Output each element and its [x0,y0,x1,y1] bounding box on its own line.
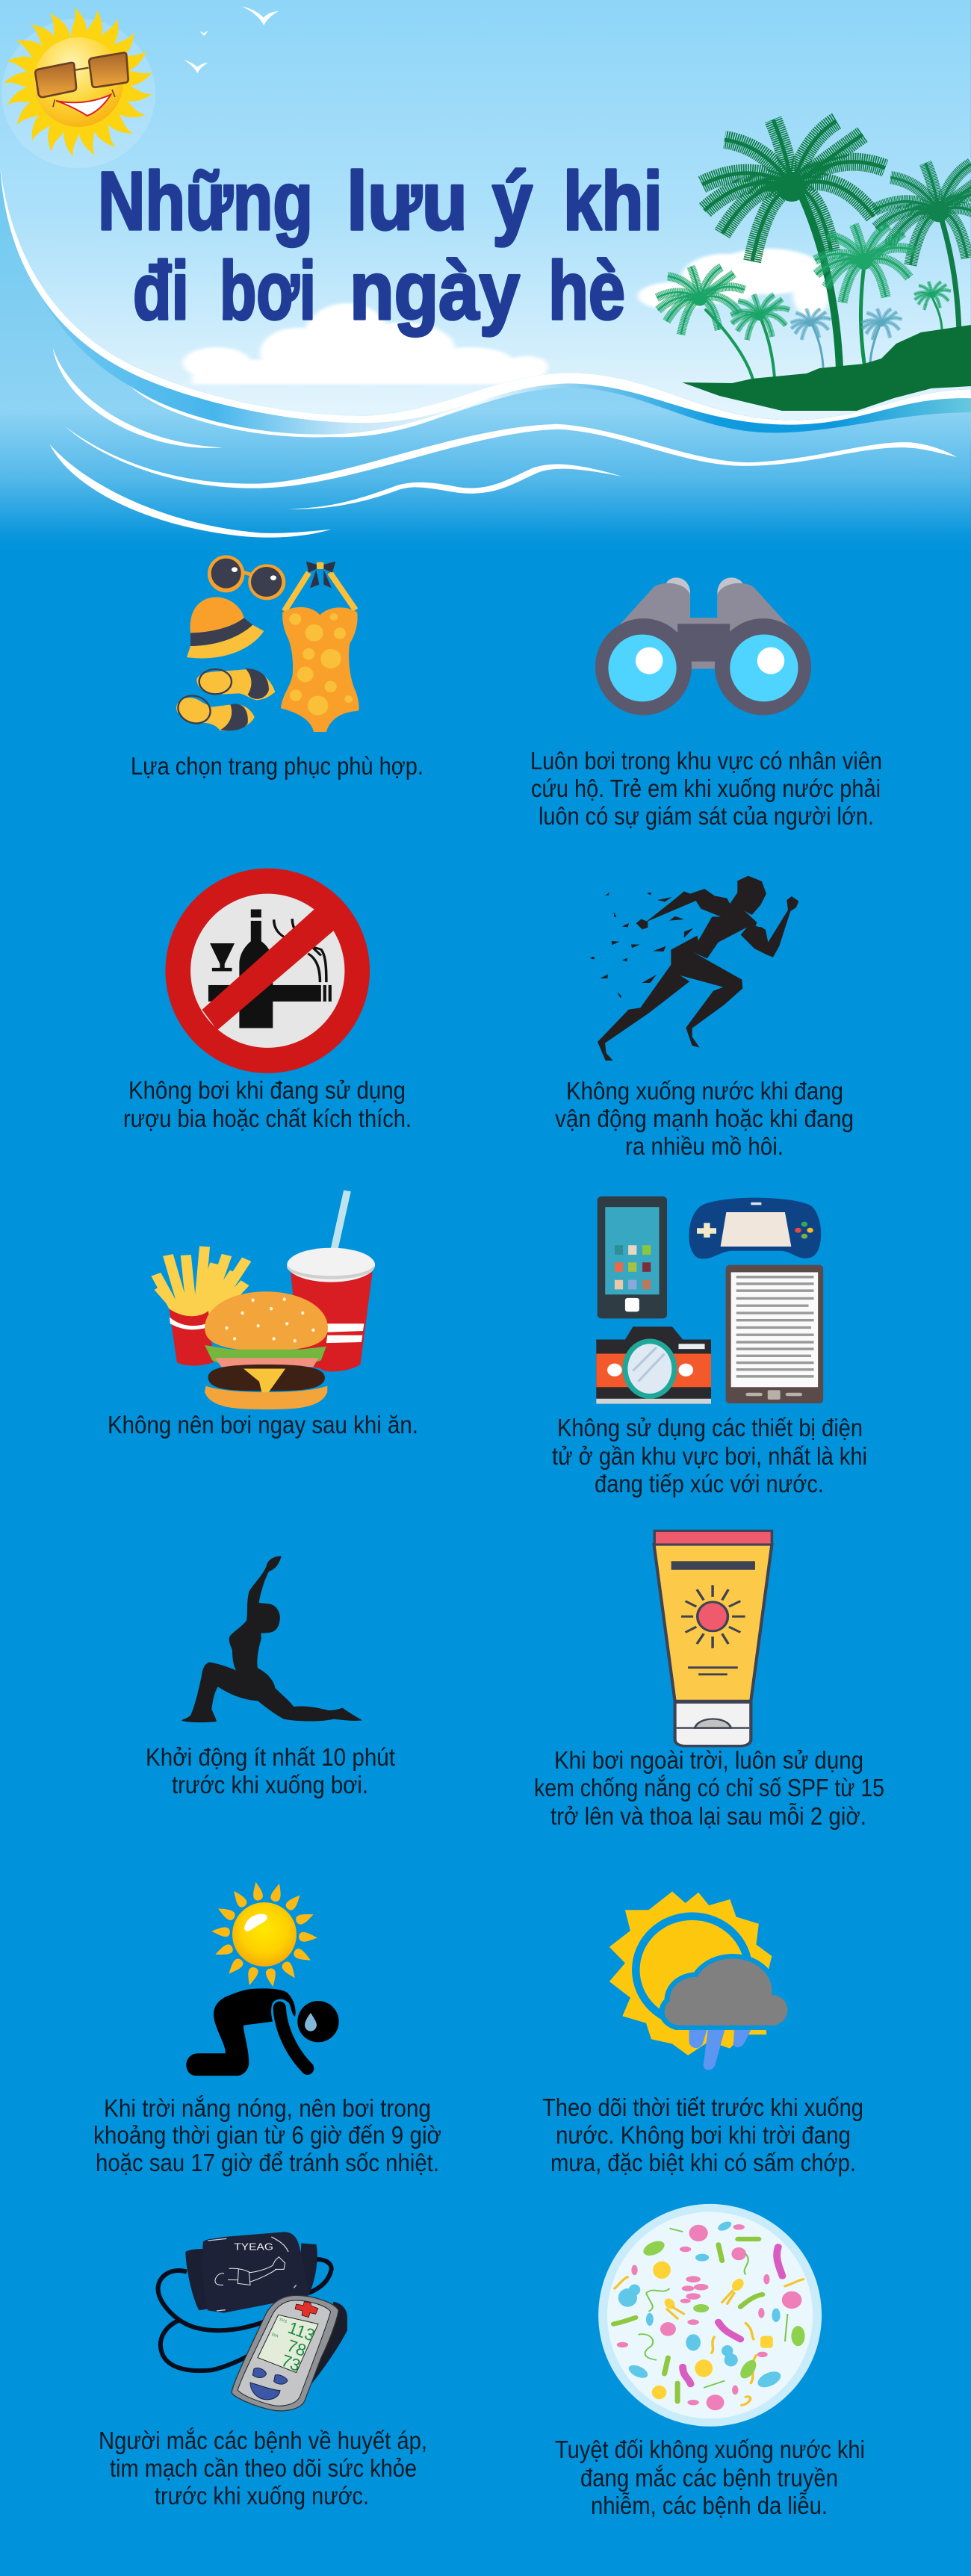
panel: warm up [146,1556,395,1798]
caption: Khởi động ít nhất 10 phút [146,1743,395,1771]
caption: trở lên và thoa lại sau mỗi 2 giờ. [550,1802,866,1830]
icon: fast food [156,1191,375,1409]
title: Những [98,155,313,247]
caption: rượu bia hoặc chất kích thích. [123,1105,412,1132]
white wave line B [65,424,957,488]
white wave line D [288,465,622,509]
white wave line C [49,444,332,538]
title: khi [563,155,663,247]
header banner [0,0,971,553]
icon: no alcohol or smoking sign [165,869,370,1073]
caption: luôn có sự giám sát của người lớn. [539,802,874,830]
icon: electronic devices [596,1197,823,1404]
icon: running man [590,876,798,1061]
icon: swimwear and accessories [174,555,359,732]
white wave line A [52,347,223,448]
icon: yoga silhouette [182,1556,362,1722]
caption: Theo dõi thời tiết trước khi xuống [542,2094,863,2121]
caption [555,2436,865,2519]
caption: kem chống nắng có chỉ số SPF từ 15 [534,1774,884,1801]
caption: Luôn bơi trong khu vực có nhân viên [530,747,882,775]
caption: nước. Không bơi khi trời đang [556,2121,851,2149]
birds [184,6,279,73]
panel: after eating [108,1191,418,1438]
caption: Không xuống nước khi đang [566,1077,843,1105]
caption [146,1743,395,1798]
panel: lifeguard [530,577,882,830]
panel: electronics [552,1197,867,1498]
caption [99,2427,427,2510]
panel: sunscreen [534,1531,884,1830]
icon: sun over kneeling person [186,1881,339,2076]
caption: cứu hộ. Trẻ em khi xuống nước phải [531,775,881,802]
panel: infectious disease [555,2204,865,2519]
caption: Không bơi khi đang sử dụng [128,1076,406,1104]
caption: Khi trời nắng nóng, nên bơi trong [104,2094,431,2122]
panel: heat stroke [93,1881,441,2176]
icon: binoculars [595,577,811,716]
caption [542,2094,863,2176]
icon: blood pressure monitor: 113 [285,2318,317,2345]
caption: đang mắc các bệnh truyền [580,2464,838,2492]
icon: blood pressure monitor: 78 [285,2336,309,2360]
caption [93,2094,441,2176]
caption: trước khi xuống nước. [155,2482,369,2510]
caption [123,1076,412,1132]
caption: Không sử dụng các thiết bị điện [557,1414,863,1441]
icon: blood pressure monitor [158,2232,347,2411]
icon: blood pressure monitor: TYEAG [234,2242,273,2253]
caption [530,747,882,830]
caption: vận động mạnh hoặc khi đang [555,1105,854,1132]
caption: Tuyệt đối không xuống nước khi [555,2436,865,2463]
lower wave streak [130,386,495,437]
panel: blood pressure [99,2232,427,2510]
caption: Không nên bơi ngay sau khi ăn. [108,1411,418,1438]
panel: swimwear [131,555,424,780]
palm trees and island [657,120,971,411]
caption: tim mạch cần theo dõi sức khỏe [110,2454,417,2482]
caption: trước khi xuống bơi. [172,1771,368,1798]
icon: sunscreen tube [654,1531,772,1746]
title: đi [133,245,189,337]
caption: nhiễm, các bệnh da liễu. [591,2492,828,2519]
panel: weather [542,1892,863,2176]
icon: sun and rain cloud [609,1892,787,2070]
title [98,155,663,337]
icon: petri dish of germs [598,2204,822,2427]
panel: no alcohol [123,869,412,1132]
title: hè [548,245,625,337]
icon: blood pressure monitor: DIA [271,2333,279,2339]
caption: đang tiếp xúc với nước. [595,1470,824,1498]
title: ngày [350,245,520,337]
title: lưu [347,155,468,247]
title: bơi [220,245,316,337]
caption [552,1414,867,1498]
sun with sunglasses [1,7,155,168]
caption [534,1746,884,1830]
caption: tử ở gần khu vực bơi, nhất là khi [552,1442,867,1470]
caption: Người mắc các bệnh về huyết áp, [99,2427,427,2454]
caption: mưa, đặc biệt khi có sấm chớp. [550,2149,856,2176]
title: ý [492,155,533,247]
caption: khoảng thời gian từ 6 giờ đến 9 giờ [93,2121,441,2149]
caption: hoặc sau 17 giờ để tránh sốc nhiệt. [96,2149,439,2176]
caption: Khi bơi ngoài trời, luôn sử dụng [554,1746,863,1774]
panel: no running [555,876,854,1160]
icon: blood pressure monitor: 73 [279,2350,303,2375]
caption: ra nhiều mồ hôi. [625,1132,784,1160]
caption [555,1077,854,1160]
caption: Lựa chọn trang phục phù hợp. [131,752,424,780]
icon: blood pressure monitor: SYS [279,2318,288,2324]
